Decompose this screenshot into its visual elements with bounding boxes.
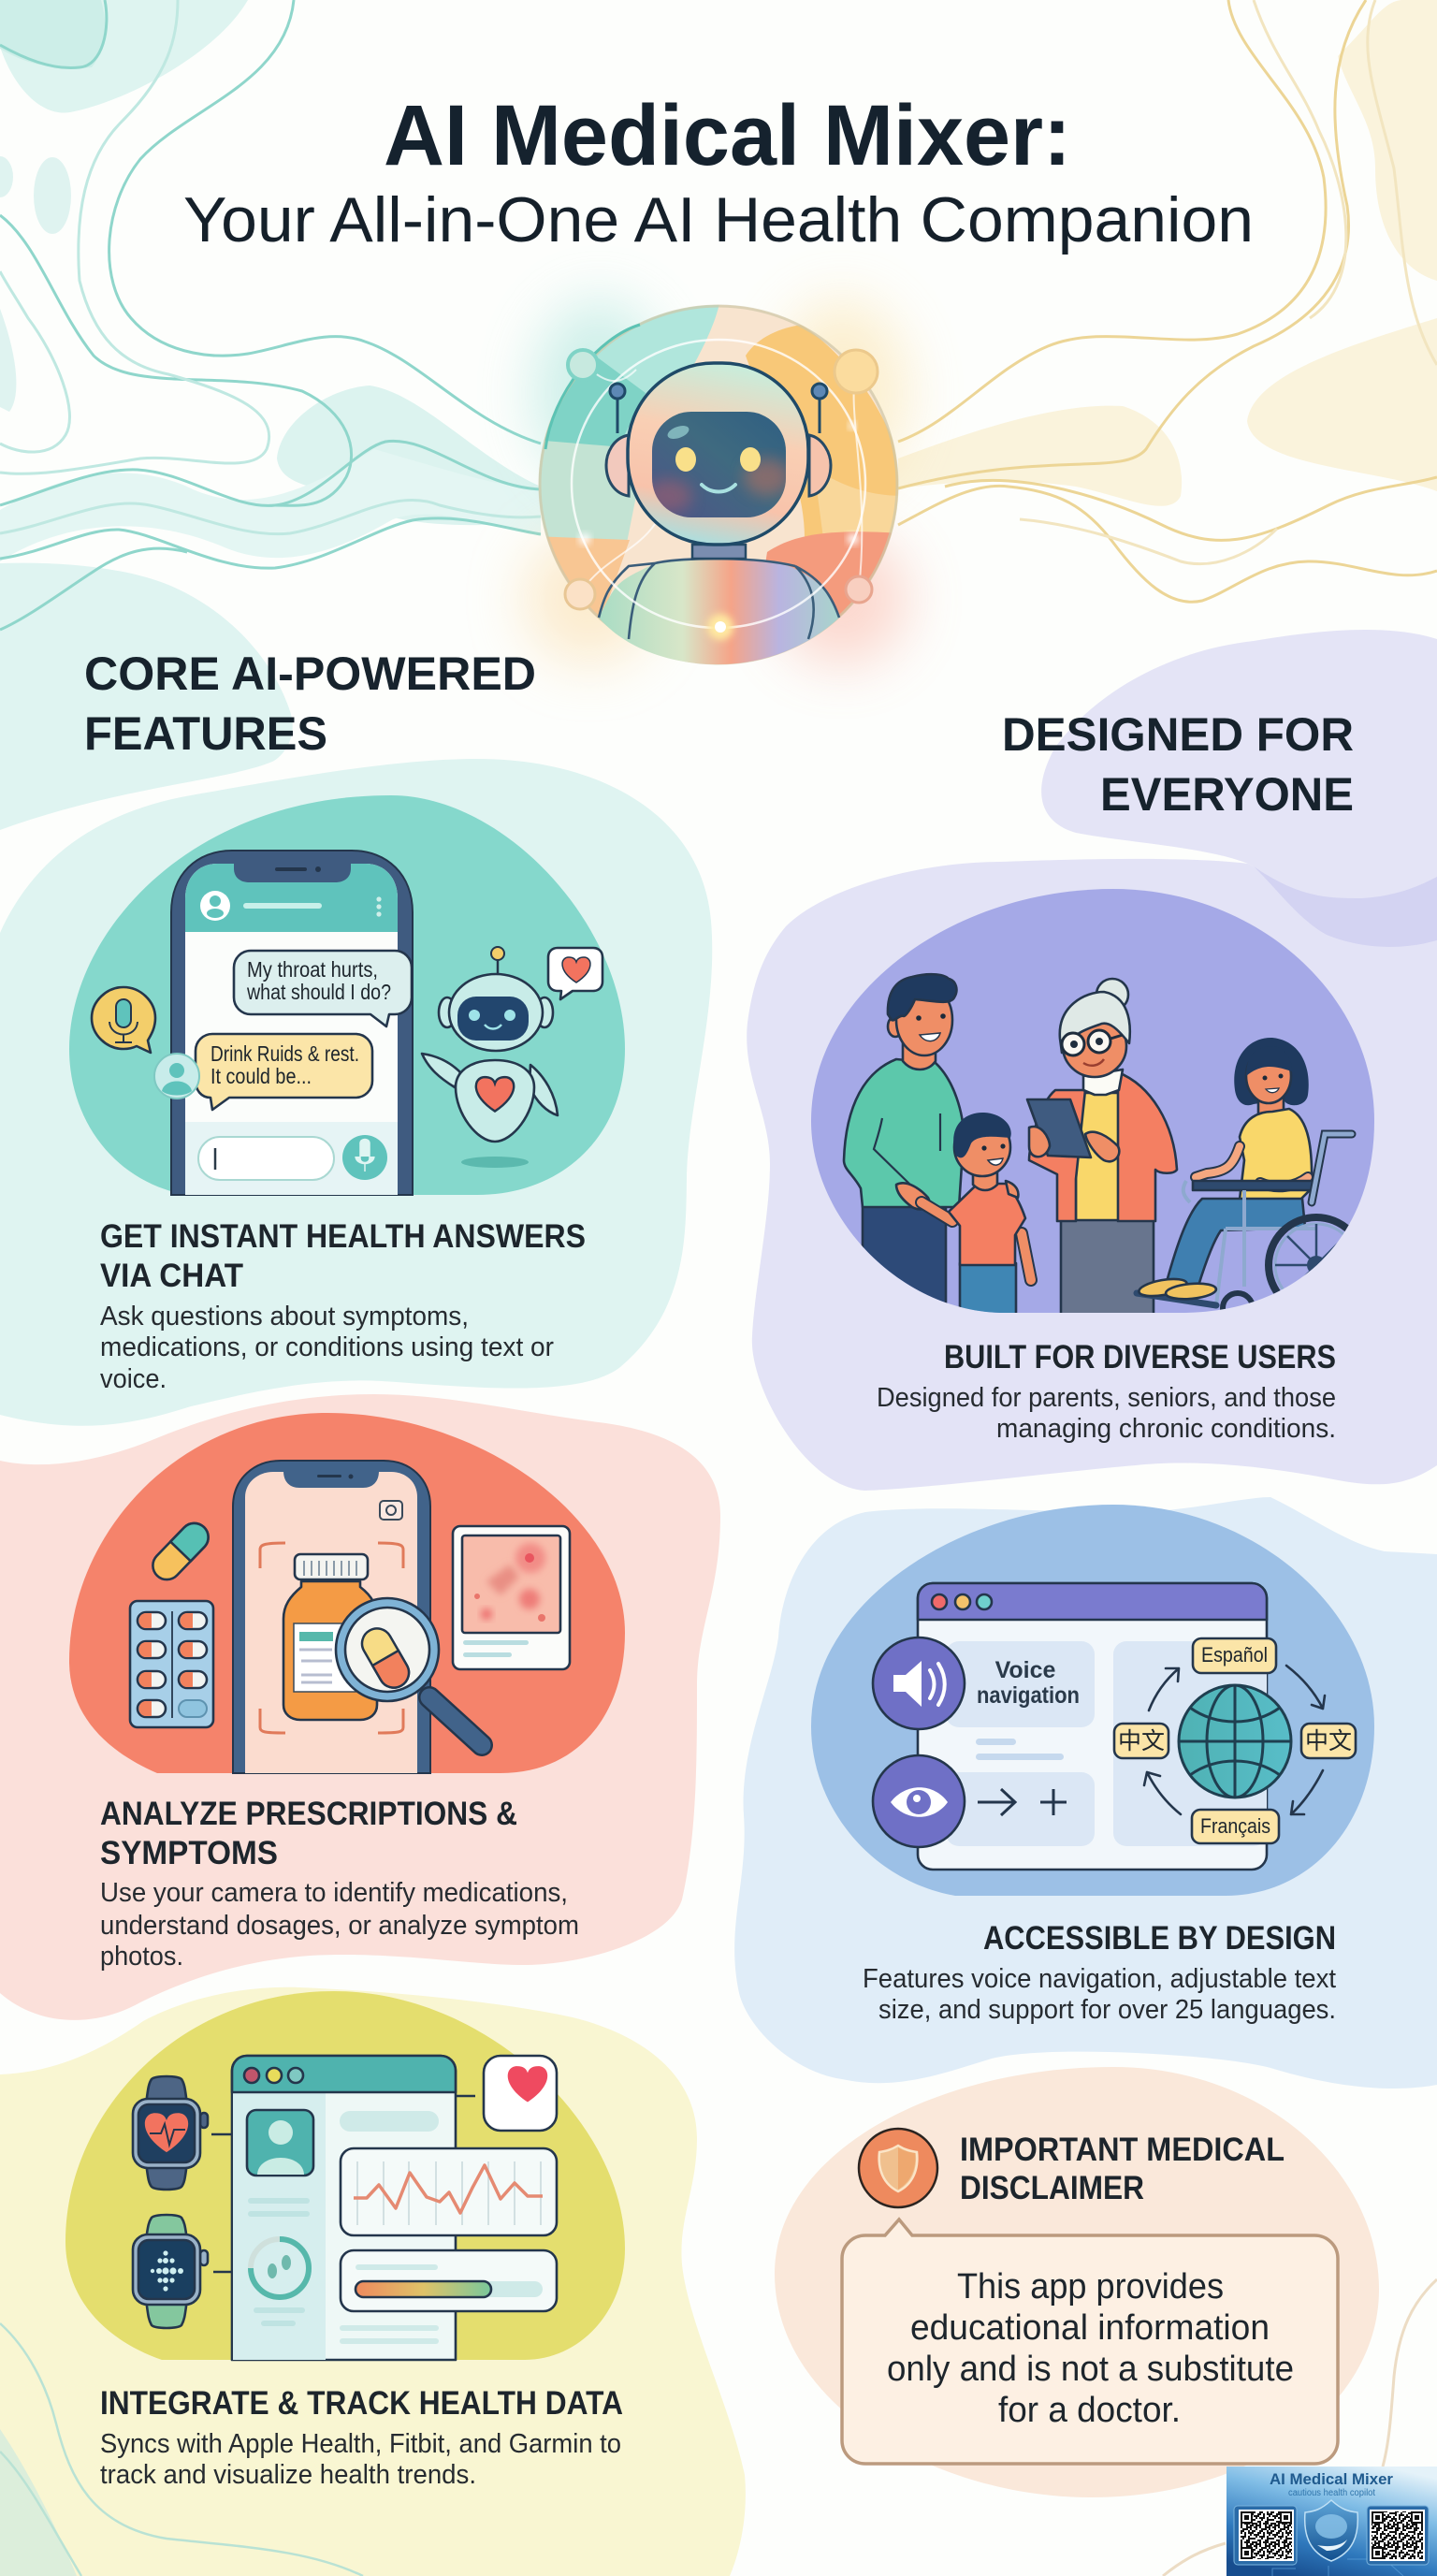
text: accessibility [863,1920,1336,2025]
title: AI Medical Mixer: [384,88,1071,183]
chart: progress bar card [341,2250,557,2311]
callout: disclaimer message: only and is not a substitute [887,2350,1294,2389]
text: tracking feature: Syncs with Apple Health, Fitbit, and Garmin to [100,2429,621,2459]
callout: disclaimer message: for a doctor. [998,2391,1181,2430]
text: chat feature [100,1218,586,1394]
text: prescription feature: photos. [100,1942,183,1972]
text: accessibility: ACCESSIBLE BY DESIGN [983,1920,1336,1957]
callout: disclaimer message [842,2219,1338,2464]
title: Your All-in-One AI Health Companion [183,184,1254,255]
label: Chinese right [1301,1724,1356,1758]
figure: woman in wheelchair [1137,1038,1364,1323]
text: diverse users: BUILT FOR DIVERSE USERS [944,1339,1336,1375]
figure: father [844,974,964,1329]
text: chat feature: Ask questions about symptoms, [100,1302,469,1332]
QR code: right [1367,2506,1429,2565]
background: teal flow lines [0,0,541,630]
panel: important medical disclaimer [775,2067,1379,2497]
icon: globe [1179,1685,1291,1797]
chat bubble: AI reply [196,1034,372,1110]
icon: capsule [147,1518,214,1585]
text: prescription feature: ANALYZE PRESCRIPTIONS & [100,1796,517,1832]
text: chat feature: medications, or conditions using text or [100,1332,554,1362]
language arrows [1144,1666,1325,1814]
QR code: left [1234,2506,1297,2565]
text: tracking feature: track and visualize health trends. [100,2460,476,2490]
icon: eye circle [873,1755,965,1847]
label: Chinese right: 中文 [1305,1728,1352,1754]
icon: friendly robot [422,947,602,1168]
icon: speaker circle [873,1637,965,1729]
panel: analyze prescriptions and symptoms [0,1394,720,2020]
panel: accessible by design [734,1497,1437,2088]
label: Español [1193,1638,1276,1673]
figure: grandmother with tablet [1027,979,1177,1329]
badge: app QR codes: cautious health copilot [1288,2488,1375,2498]
icon: blister pack [130,1601,213,1727]
text: chat feature: GET INSTANT HEALTH ANSWERS [100,1218,586,1255]
icon: health app tile [456,2056,557,2131]
panel: instant health answers via chat [0,759,712,1426]
text: prescription feature: SYMPTOMS [100,1835,278,1871]
text: prescription feature: understand dosages, or analyze symptom [100,1911,579,1941]
label: Chinese left [1114,1724,1168,1758]
label: voice navigation [977,1657,1080,1709]
icon: microphone bubble [92,987,155,1053]
icon: magnifying glass [336,1598,482,1745]
background: yellow flow lines [898,0,1437,602]
figure: child [922,1113,1031,1329]
decorative lavender blob behind right heading [1041,630,1437,947]
icon: fitness smartwatch [133,2215,232,2328]
text: tracking feature: INTEGRATE & TRACK HEALTH DATA [100,2385,623,2422]
section heading: designed for everyone [1002,708,1354,821]
illustration: phone scanning medication [233,1461,482,1773]
chat bubble: user question [234,951,412,1026]
chat bubble: AI reply: Drink Ruids & rest. [210,1041,359,1066]
text: diverse users: Designed for parents, seniors, and those [877,1383,1336,1413]
text: prescription feature [100,1796,579,1972]
illustration: diverse family group [844,974,1364,1329]
badge: app QR codes: AI Medical Mixer [1270,2470,1393,2488]
illustration: health dashboard [232,2056,456,2360]
title [183,88,1254,255]
section heading: core AI-powered features: CORE AI-POWERED [84,648,536,700]
label: Español: Español [1201,1643,1268,1666]
badge: app QR codes [1227,2467,1437,2576]
heading: disclaimer [960,2132,1285,2206]
label: Chinese left: 中文 [1118,1728,1165,1754]
chat bubble: user question: My throat hurts, [247,957,378,982]
text: diverse users [877,1339,1336,1444]
section heading: core AI-powered features [84,648,536,760]
panel: built for diverse users [747,859,1437,1491]
background: beige corner lines [1163,2279,1437,2576]
label: Français: Français [1200,1814,1270,1838]
icon: heart-rate smartwatch [133,2076,232,2190]
label: voice navigation: navigation [977,1682,1080,1709]
callout: disclaimer message: educational information [910,2308,1270,2348]
heading: disclaimer: DISCLAIMER [960,2170,1144,2206]
illustration: phone chat [154,851,413,1195]
background: yellow flowing shapes [898,0,1437,506]
text: tracking feature [100,2385,623,2490]
section heading: designed for everyone: DESIGNED FOR [1002,708,1354,761]
chat bubble: AI reply: It could be... [210,1064,312,1088]
illustration: accessible browser window [918,1583,1267,1870]
panel: integrate and track health data [0,1987,746,2576]
icon: medicine bottle [283,1554,377,1720]
text: accessibility: size, and support for over 25 languages. [878,1995,1336,2025]
text: chat feature: VIA CHAT [100,1258,243,1294]
section heading: designed for everyone: EVERYONE [1100,768,1354,821]
heading: disclaimer: IMPORTANT MEDICAL [960,2132,1285,2168]
text: accessibility: Features voice navigation, adjustable text [863,1964,1336,1994]
section heading: core AI-powered features: FEATURES [84,707,327,760]
label: Français [1192,1810,1279,1843]
label: voice navigation: Voice [995,1657,1056,1683]
callout: disclaimer message: This app provides [957,2267,1224,2307]
icon: shield badge [859,2129,937,2207]
chat bubble: user question: what should I do? [246,980,391,1004]
text: diverse users: managing chronic conditions. [996,1414,1336,1444]
text: chat feature: voice. [100,1364,167,1394]
central AI robot emblem [524,299,907,674]
icon: symptom photo card [453,1526,570,1669]
chart: health trend line [341,2148,557,2235]
text: prescription feature: Use your camera to identify medications, [100,1878,568,1908]
background: teal flowing shapes [0,0,541,830]
icon: shield with brain [1305,2500,1357,2561]
